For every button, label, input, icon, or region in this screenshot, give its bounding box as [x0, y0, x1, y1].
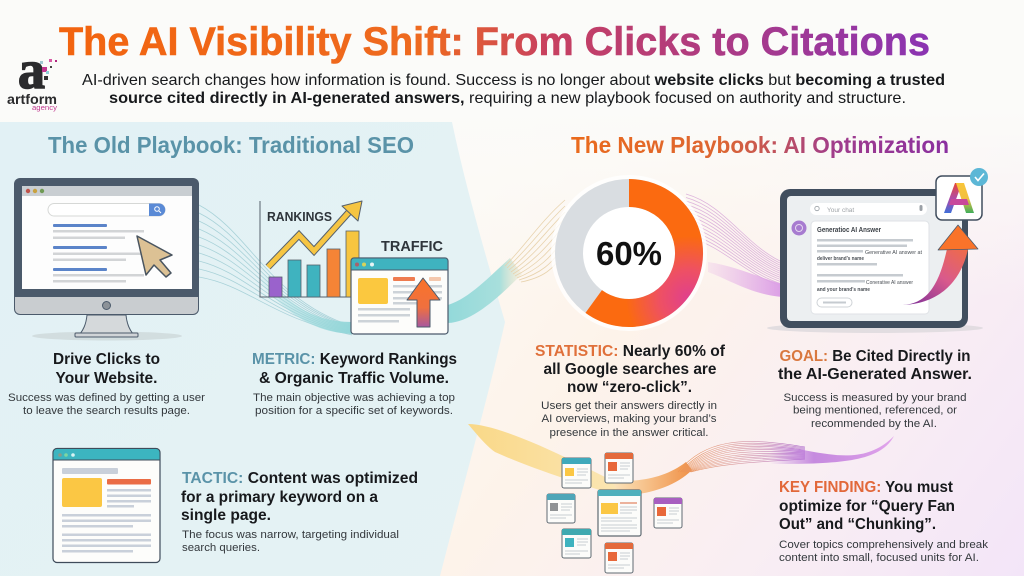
icon: tablet with generative AI answer: Generative AI answer at	[865, 250, 922, 256]
icon: tablet with generative AI answer: Your chat	[827, 207, 854, 214]
subtitle: source cited directly in AI-generated answers, requiring a new playbook focused on authority and structure.	[109, 90, 906, 107]
icon: desktop monitor with search results	[14, 178, 199, 340]
text: key finding: KEY FINDING: You must	[779, 479, 953, 496]
text: tactic: search queries.	[182, 542, 260, 554]
wave: monitor to chart	[199, 205, 352, 335]
icon: brand A badge with check	[936, 168, 988, 220]
text: key finding: content into small, focused units for AI.	[779, 552, 979, 564]
text: goal	[778, 348, 972, 430]
wave: traffic to donut	[448, 200, 565, 323]
logo: artform agency: artform	[7, 92, 57, 107]
chunk card: purple	[654, 498, 682, 528]
text: tactic: for a primary keyword on a	[181, 489, 378, 506]
text: goal: recommended by the AI.	[811, 418, 937, 430]
text: tactic: TACTIC: Content was optimized	[182, 470, 418, 487]
heading: new playbook: The New Playbook: AI Optimization	[571, 132, 949, 158]
text: goal: Success is measured by your brand	[784, 392, 966, 404]
heading: old playbook: The Old Playbook: Traditional SEO	[48, 132, 414, 158]
icon: tablet with generative AI answer	[767, 189, 983, 333]
subtitle: AI-driven search changes how information is found. Success is no longer about website clicks but becoming a trusted	[82, 72, 945, 89]
text: statistic	[535, 343, 726, 439]
chart: rankings bars with arrow	[260, 201, 362, 297]
text: drive clicks: Your Website.	[56, 370, 158, 387]
text: metric: METRIC: Keyword Rankings	[252, 351, 457, 368]
text: drive clicks: to leave the search results page.	[23, 405, 190, 417]
text: goal: being mentioned, referenced, or	[793, 404, 957, 416]
icon: tablet with generative AI answer: Conerative AI answer	[866, 280, 913, 286]
panel: old playbook background	[0, 122, 505, 576]
text: statistic: STATISTIC: Nearly 60% of	[535, 343, 726, 360]
text: statistic: all Google searches are	[544, 361, 717, 378]
chart: rankings bars with arrow: RANKINGS	[267, 209, 332, 224]
chart: 60% donut	[551, 175, 707, 331]
text: key finding: Cover topics comprehensively and break	[779, 539, 989, 551]
text: statistic: AI overviews, making your brand’s	[542, 413, 717, 425]
text: tactic: single page.	[181, 507, 271, 524]
chunk card: orange	[605, 453, 633, 483]
text: tactic: The focus was narrow, targeting individual	[182, 529, 399, 541]
text: key finding: optimize for “Query Fan	[779, 498, 955, 515]
wave: chunks to key finding	[468, 424, 894, 497]
logo: artform agency: agency	[32, 105, 58, 112]
text: statistic: now “zero-click”.	[567, 379, 692, 396]
chunk card: teal teal	[562, 529, 591, 558]
text: metric: & Organic Traffic Volume.	[259, 370, 449, 387]
subtitle	[82, 72, 945, 107]
chunk card: teal yellow	[562, 458, 591, 488]
icon: traffic browser window: TRAFFIC	[381, 238, 443, 255]
text: metric: position for a specific set of keywords.	[255, 405, 453, 417]
title: The AI Visibility Shift: From Clicks to Citations	[59, 20, 930, 64]
text: drive clicks	[8, 351, 205, 417]
icon: single page document	[53, 448, 160, 562]
text: key finding	[779, 479, 989, 564]
text: drive clicks: Success was defined by getting a user	[8, 392, 205, 404]
chunk card: orange lower	[605, 543, 633, 573]
text: statistic: Users get their answers directly in	[541, 400, 717, 412]
icon: tablet with generative AI answer: deliver brand’s name	[817, 256, 864, 262]
icon: tablet with generative AI answer: and your brand’s name	[817, 287, 870, 293]
text: metric: The main objective was achieving a top	[253, 392, 455, 404]
chart: 60% donut: 60%	[596, 235, 662, 272]
text: key finding: Out” and “Chunking”.	[779, 516, 936, 533]
icon: cluster of content chunks	[547, 453, 682, 573]
text: metric	[252, 351, 457, 417]
wave: donut to tablet	[686, 194, 782, 297]
chunk card: main	[598, 490, 641, 536]
text: goal: GOAL: Be Cited Directly in	[780, 348, 970, 365]
icon: tablet with generative AI answer: Generatioc AI Answer	[817, 227, 881, 234]
logo: artform agency: a	[18, 40, 45, 100]
text: drive clicks: Drive Clicks to	[53, 351, 160, 368]
logo: artform agency	[7, 40, 58, 112]
text: goal: the AI-Generated Answer.	[778, 366, 972, 383]
chunk card: teal grey	[547, 494, 575, 523]
icon: traffic browser window	[351, 238, 448, 334]
text: statistic: presence in the answer critical.	[550, 427, 708, 439]
text: tactic	[181, 470, 418, 554]
